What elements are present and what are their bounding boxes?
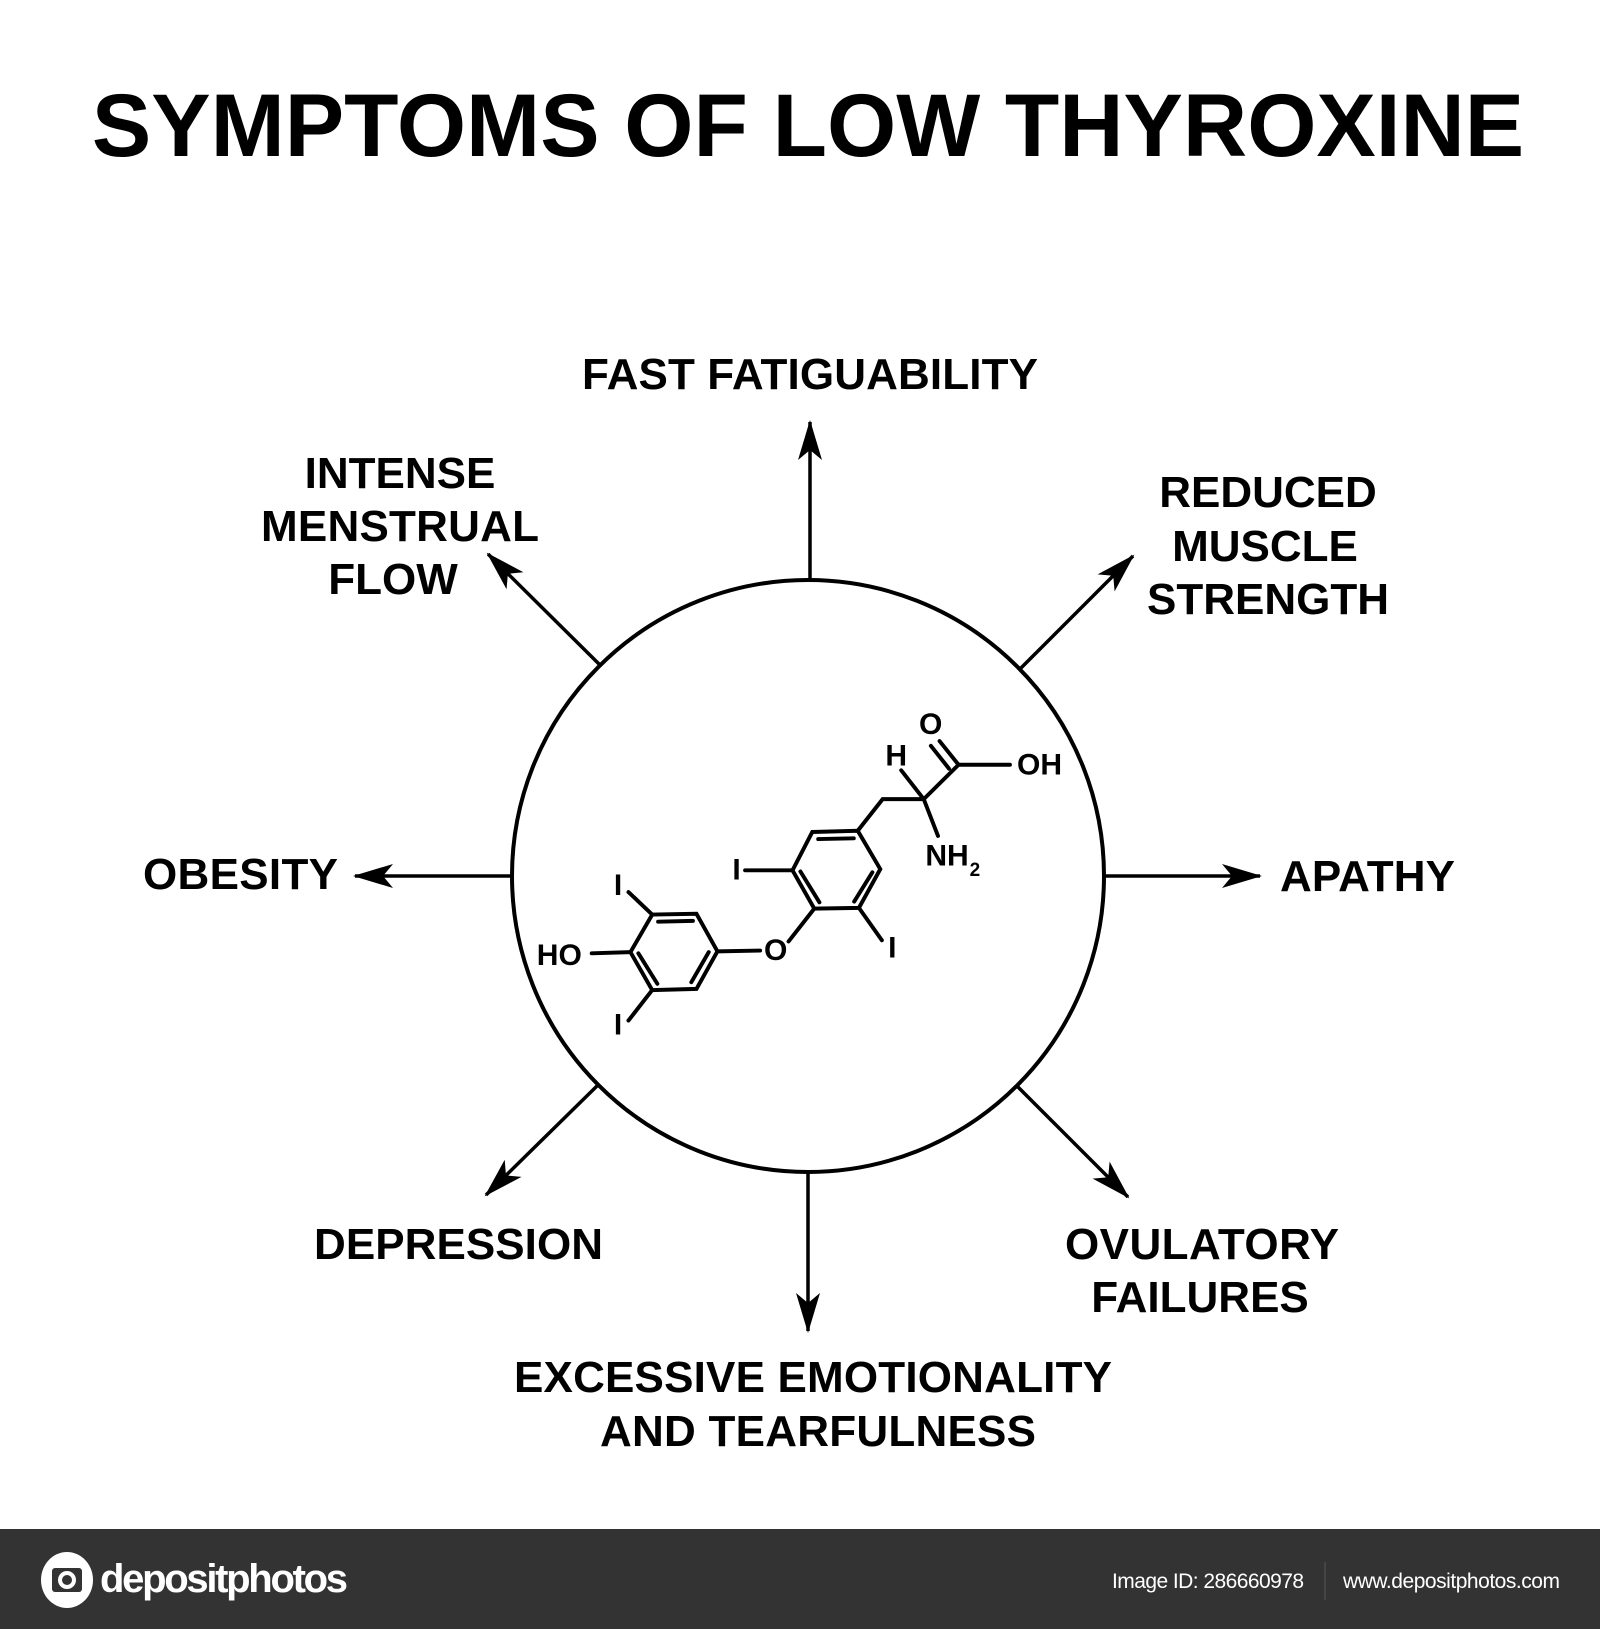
label: ovulatory failures: FAILURES: [1091, 1273, 1309, 1322]
label: reduced muscle strength: MUSCLE: [1172, 522, 1358, 571]
arrow: upper right: [1021, 556, 1133, 668]
label: depression: DEPRESSION: [314, 1220, 603, 1269]
label: fast fatiguability: FAST FATIGUABILITY: [582, 350, 1038, 399]
label: excessive emotionality: EXCESSIVE EMOTIONALITY: [514, 1353, 1112, 1402]
molecule: thyroxine: I: [614, 869, 622, 902]
molecule: thyroxine: OH: [1017, 748, 1062, 781]
molecule: thyroxine: H: [885, 740, 907, 773]
arrow: lower left: [486, 1085, 598, 1195]
molecule: thyroxine: O: [919, 708, 942, 741]
label: intense menstrual flow: INTENSE: [305, 449, 495, 498]
label: intense menstrual flow: MENSTRUAL: [261, 502, 539, 551]
molecule: thyroxine: I: [614, 1008, 622, 1041]
molecule: thyroxine: HO: [537, 939, 582, 972]
label: intense menstrual flow: [261, 449, 539, 604]
label: reduced muscle strength: STRENGTH: [1147, 575, 1389, 624]
central circle: [512, 580, 1104, 1172]
molecule: thyroxine: I: [888, 931, 897, 964]
arrow: lower right: [1016, 1085, 1128, 1197]
label: excessive emotionality: AND TEARFULNESS: [600, 1407, 1036, 1456]
arrow: bottom: [806, 1172, 810, 1331]
title: SYMPTOMS OF LOW THYROXINE: [92, 75, 1524, 175]
label: reduced muscle strength: REDUCED: [1159, 468, 1377, 517]
label: reduced muscle strength: [1147, 468, 1389, 624]
molecule: thyroxine: O: [764, 934, 787, 967]
footer logo icon: [41, 1552, 93, 1608]
molecule: thyroxine: [537, 708, 1062, 1041]
footer bar: [0, 1529, 1600, 1629]
label: intense menstrual flow: FLOW: [328, 555, 458, 604]
arrow: top: [808, 422, 812, 579]
label: obesity: OBESITY: [143, 850, 338, 899]
molecule: thyroxine: 2: [970, 860, 980, 881]
footer image id: Image ID: 286660978: [1112, 1570, 1304, 1593]
footer logo text: depositphotos: [100, 1557, 348, 1601]
footer url: www.depositphotos.com: [1342, 1570, 1560, 1593]
molecule: thyroxine: I: [732, 853, 741, 886]
label: ovulatory failures: [1065, 1220, 1339, 1322]
arrow: left: [355, 874, 512, 878]
label: apathy: APATHY: [1280, 852, 1455, 901]
label: excessive emotionality: [514, 1353, 1112, 1456]
arrow: right: [1104, 874, 1260, 878]
arrow: upper left: [488, 554, 600, 665]
molecule: thyroxine: NH: [925, 840, 969, 873]
label: ovulatory failures: OVULATORY: [1065, 1220, 1339, 1269]
